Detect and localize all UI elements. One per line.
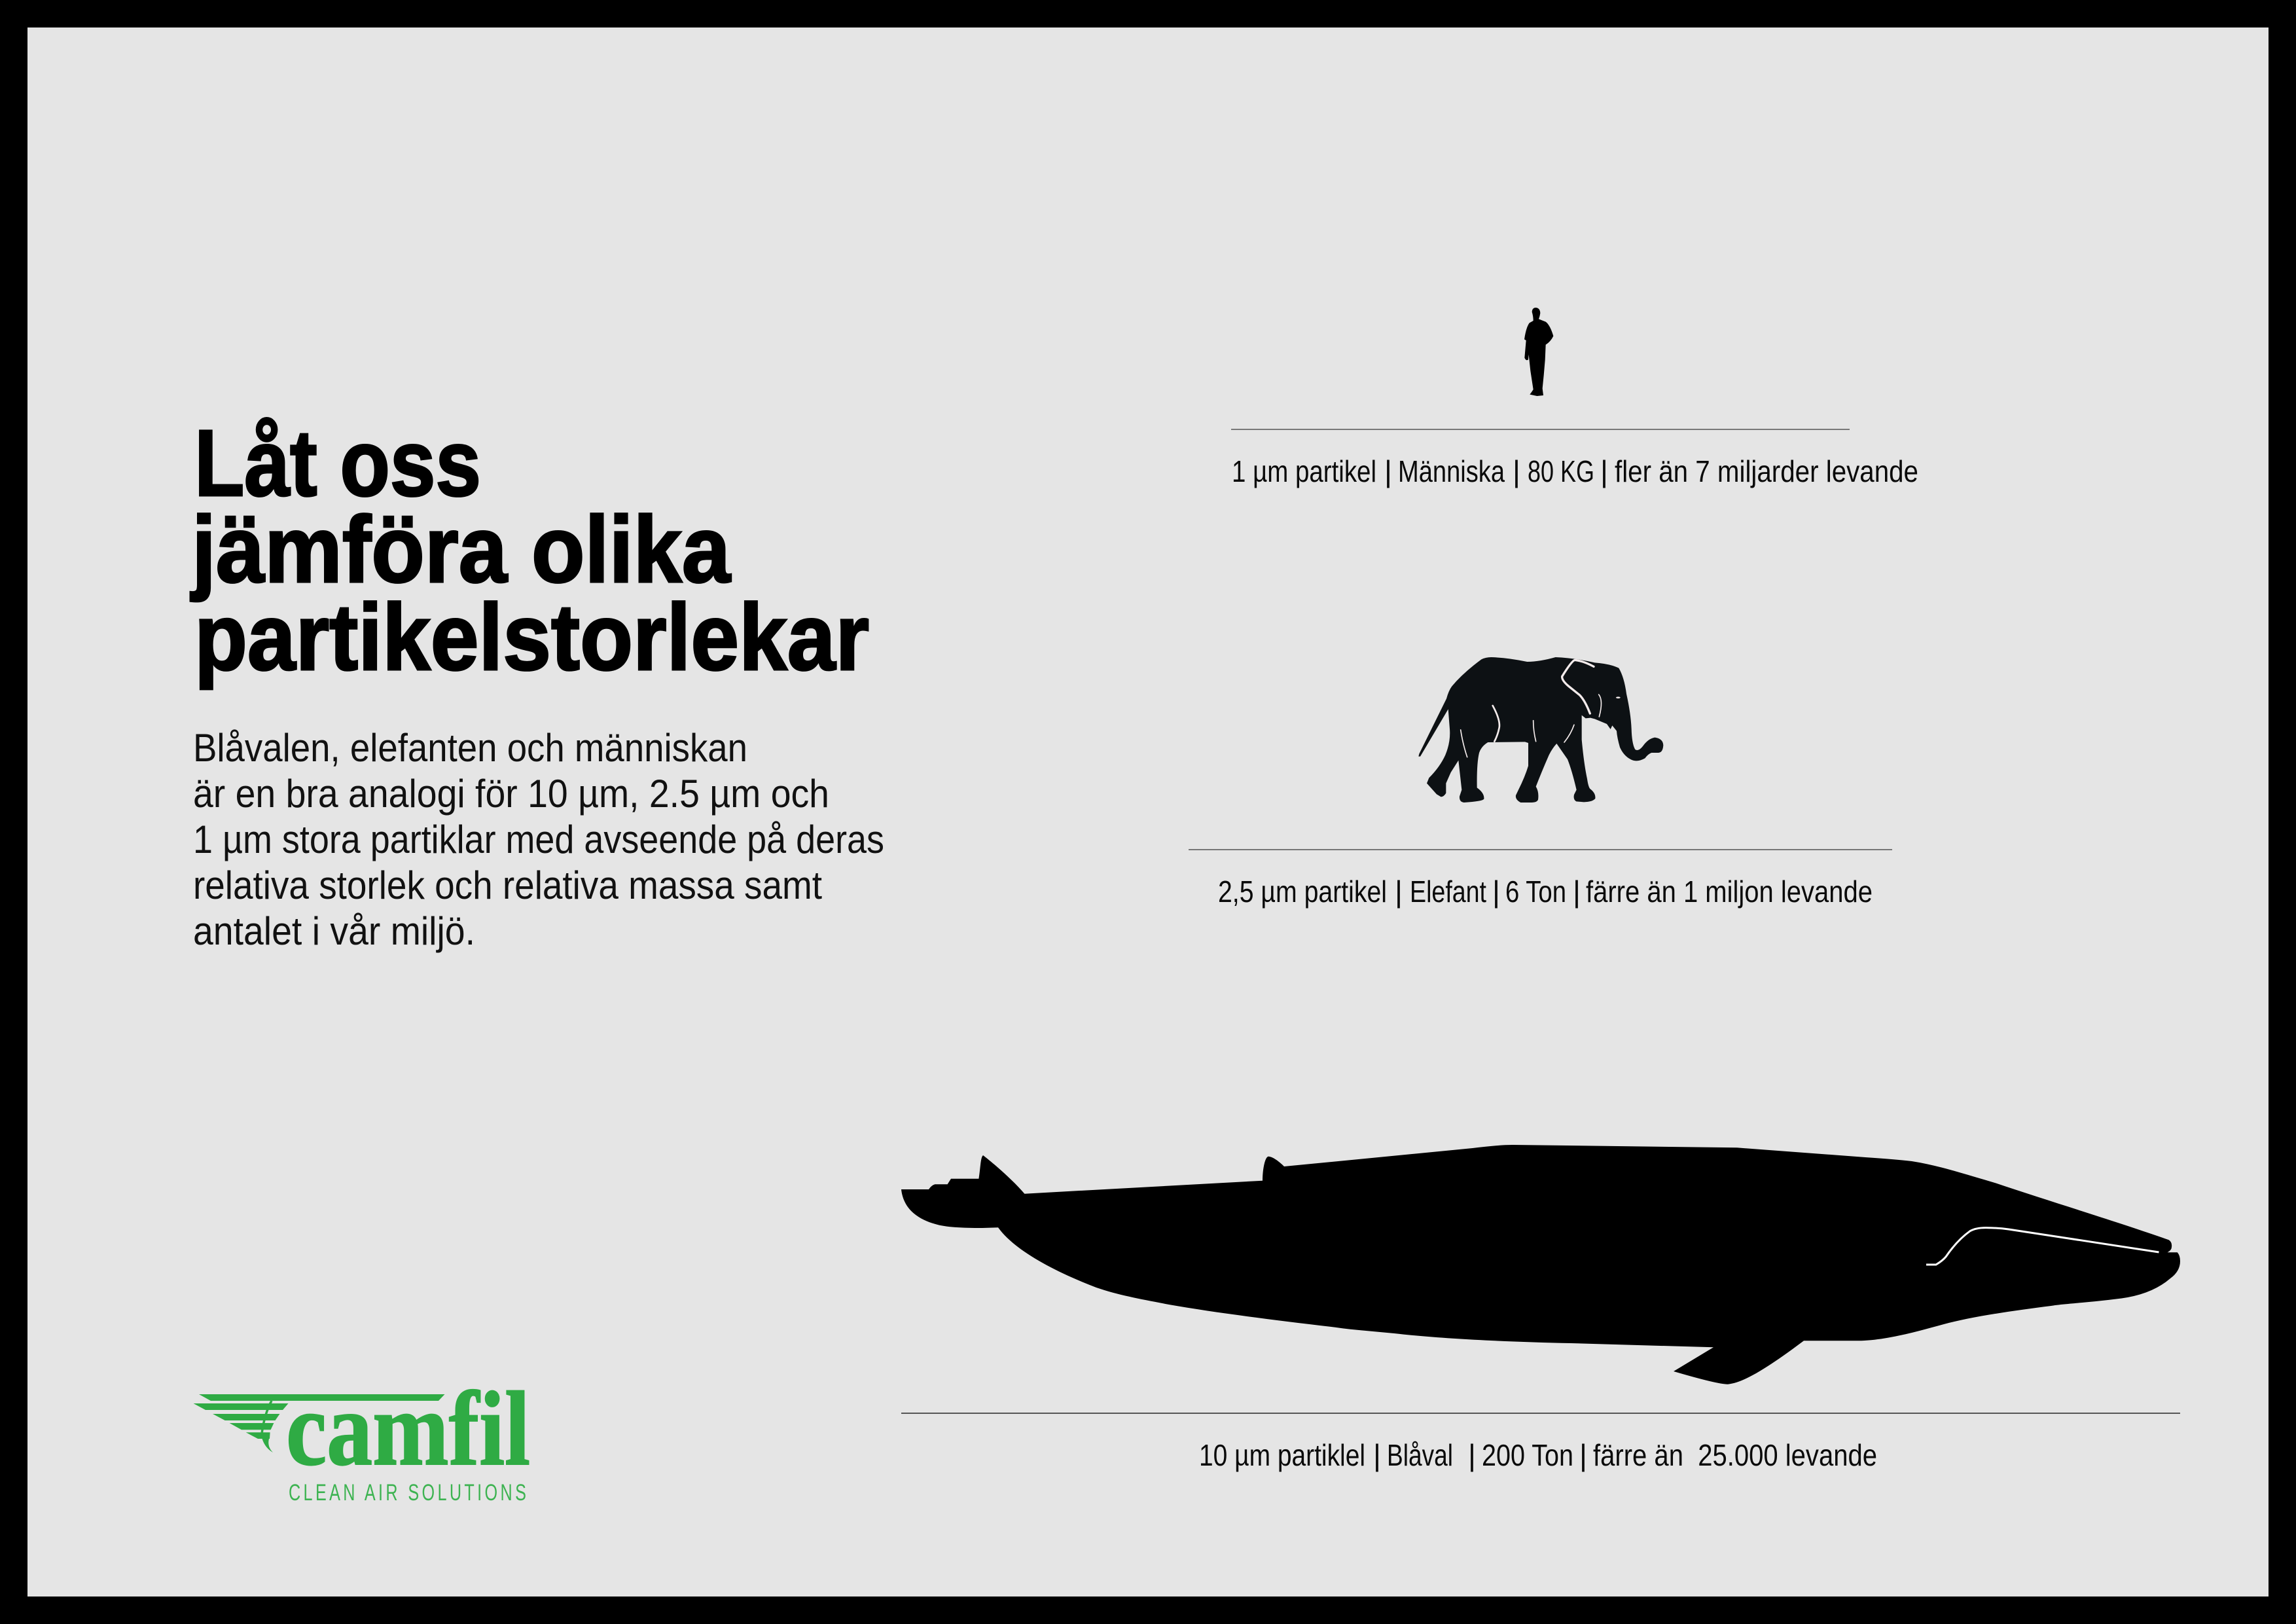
icon: blue whale silhouette (901, 1145, 2180, 1384)
caption: elephant: färre än 1 miljon levande (1586, 875, 1873, 909)
icon: elephant silhouette (1418, 657, 1663, 803)
body text: är en bra analogi för 10 µm, 2.5 µm och (193, 772, 829, 816)
body text: relativa storlek och relativa massa samt (193, 863, 822, 907)
caption: whale: 200 Ton (1482, 1438, 1573, 1472)
title: partikelstorlekar (194, 585, 869, 690)
whale mouth line (1926, 1228, 2159, 1265)
logo wordmark: camfil (286, 1371, 530, 1488)
caption: whale: | (1468, 1438, 1476, 1472)
caption: whale: | (1579, 1438, 1587, 1472)
caption: human: Människa (1398, 454, 1505, 488)
caption: human: | (1384, 454, 1392, 488)
caption: human: | (1600, 454, 1608, 488)
caption: whale: | (1373, 1438, 1381, 1472)
caption: elephant: | (1492, 875, 1500, 909)
body text: 1 µm stora partiklar med avseende på deras (193, 818, 884, 861)
logo tagline: CLEAN AIR SOLUTIONS (289, 1480, 526, 1506)
caption: whale: 10 µm partiklel (1199, 1438, 1365, 1472)
caption: human: 1 µm partikel (1232, 454, 1376, 488)
caption: human: fler än 7 miljarder levande (1615, 454, 1918, 488)
caption: whale (1199, 1438, 1877, 1472)
body text: Blåvalen, elefanten och människan (193, 726, 747, 770)
logo wing mark (194, 1394, 445, 1453)
caption: elephant: Elefant (1410, 875, 1486, 909)
caption: human: 80 KG (1528, 454, 1594, 488)
divider: human (1231, 429, 1850, 430)
title (190, 410, 869, 690)
divider: elephant (1189, 849, 1892, 850)
icon: human silhouette (1524, 308, 1553, 396)
body text: antalet i vår miljö. (193, 909, 475, 953)
logo: camfil (194, 1371, 530, 1506)
caption: human: | (1513, 454, 1520, 488)
title: Låt oss (194, 410, 481, 516)
body text (193, 726, 884, 953)
caption: elephant (1218, 875, 1873, 909)
title: jämföra olika (190, 497, 731, 602)
divider: whale (901, 1413, 2180, 1414)
caption: elephant: | (1573, 875, 1581, 909)
caption: human (1232, 454, 1918, 488)
caption: whale: Blåval (1387, 1438, 1453, 1472)
caption: elephant: | (1395, 875, 1403, 909)
caption: elephant: 6 Ton (1505, 875, 1566, 909)
caption: elephant: 2,5 µm partikel (1218, 875, 1387, 909)
caption: whale: färre än 25.000 levande (1593, 1438, 1877, 1472)
